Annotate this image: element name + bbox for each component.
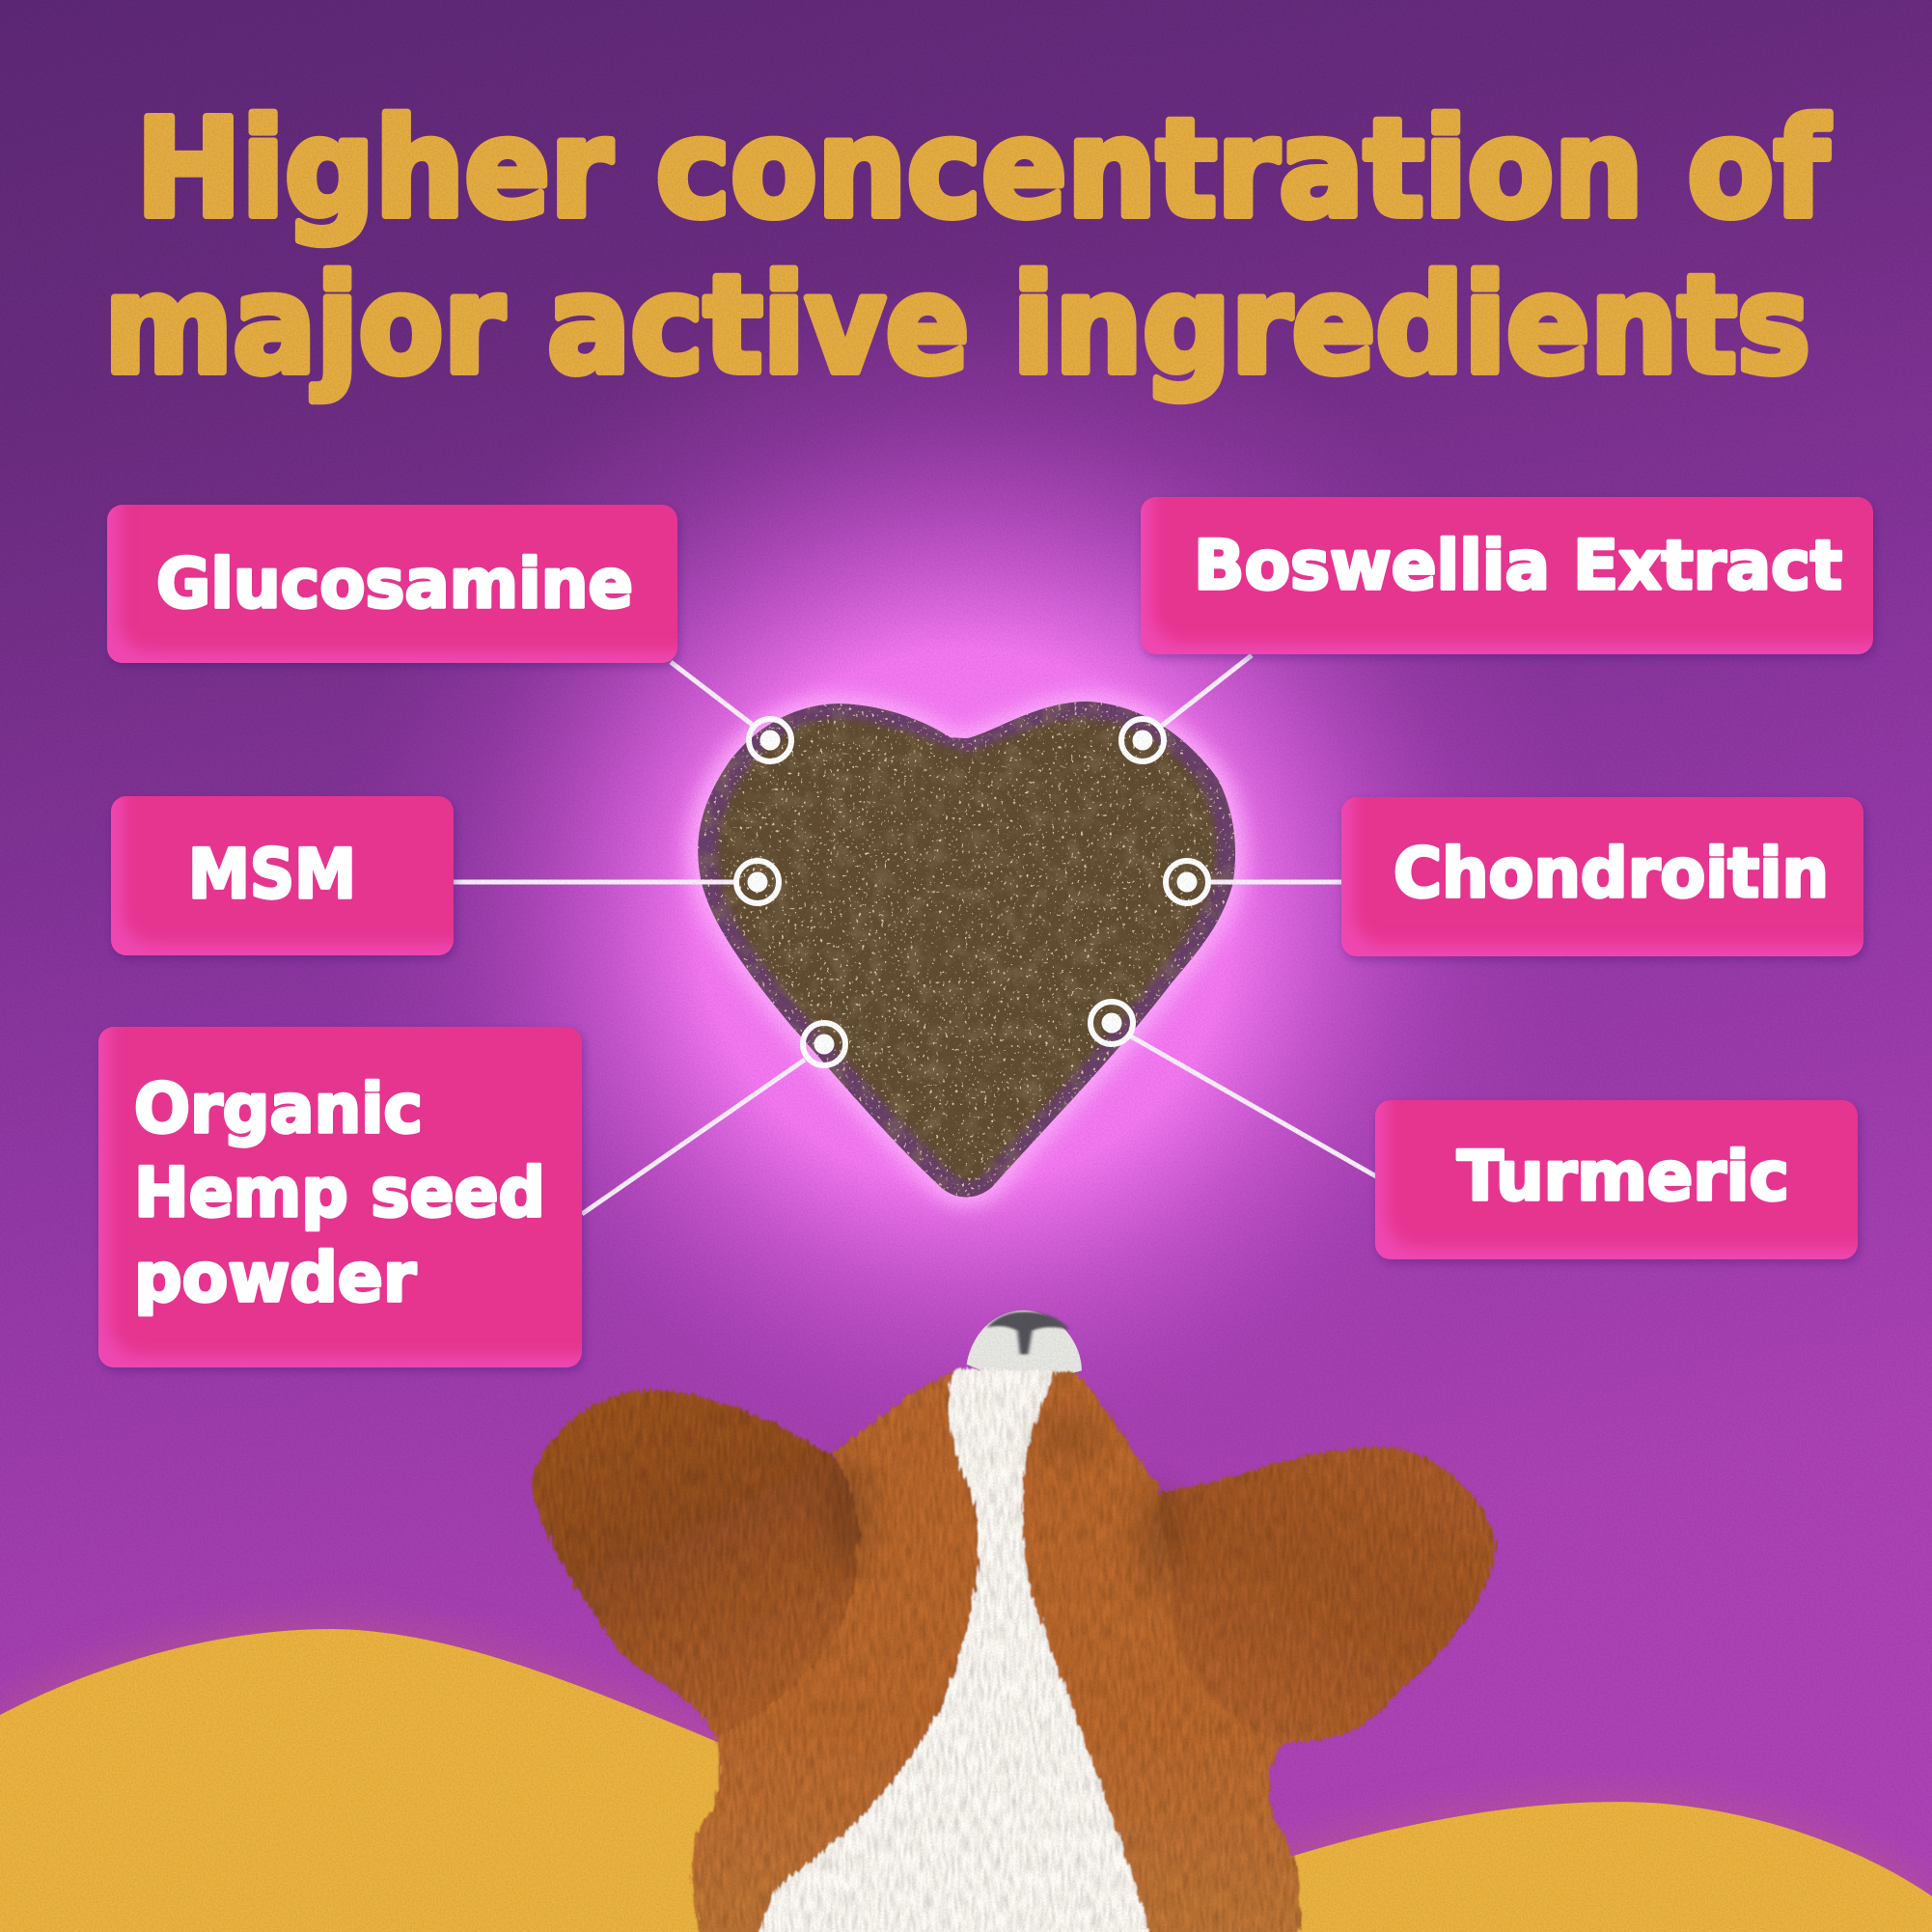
connector lines (454, 655, 1376, 1214)
heart treat (698, 702, 1235, 1198)
label: Turmeric: Turmeric (1457, 1137, 1789, 1216)
white blaze (754, 1368, 1156, 1932)
label: Organic Hemp seed powder: Hemp seed (134, 1153, 545, 1232)
nose (967, 1311, 1082, 1387)
label: Glucosamine (107, 505, 677, 663)
yellow hills (0, 1629, 1932, 1932)
title: Higher concentration of (136, 91, 1831, 248)
label: Chondroitin: Chondroitin (1394, 834, 1829, 913)
corgi seen from behind (532, 1311, 1496, 1932)
label: MSM (111, 796, 454, 955)
right ear (1146, 1448, 1496, 1744)
label: MSM: MSM (188, 835, 356, 914)
fur shading (828, 1419, 1177, 1592)
label: Boswellia Extract: Boswellia Extract (1194, 526, 1842, 605)
label: Organic Hemp seed powder (98, 1027, 582, 1367)
title: major active ingredients (104, 247, 1810, 404)
label: Turmeric (1375, 1100, 1858, 1259)
left ear (532, 1390, 870, 1737)
marker dots (736, 719, 1208, 1065)
label: Chondroitin (1341, 797, 1863, 956)
label: Organic Hemp seed powder: powder (134, 1238, 416, 1317)
label: Boswellia Extract (1141, 497, 1873, 654)
label: Organic Hemp seed powder: Organic (134, 1069, 423, 1148)
label: Glucosamine: Glucosamine (156, 544, 633, 623)
head and body fur (692, 1370, 1300, 1932)
title (104, 91, 1831, 404)
